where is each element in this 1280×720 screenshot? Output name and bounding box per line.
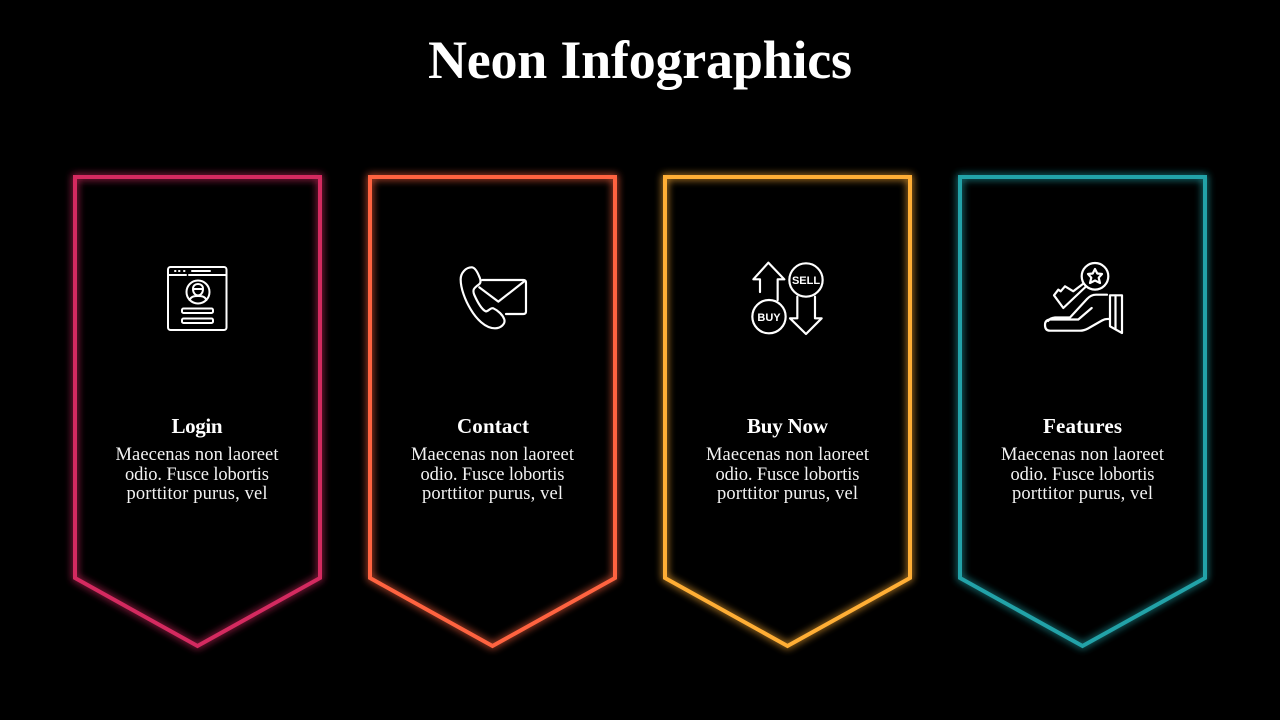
icon: phone and envelope <box>461 267 526 328</box>
text: login description: odio. Fusce lobortis <box>125 465 269 485</box>
panel: contact <box>370 177 615 646</box>
icon: buy and sell arrows: SELL <box>792 275 820 287</box>
text: buy now description: porttitor purus, vel <box>717 484 858 504</box>
title: Neon Infographics <box>428 30 852 90</box>
icon: buy and sell arrows <box>752 263 823 334</box>
heading: buy now: Buy Now <box>747 414 829 438</box>
panel: features <box>960 177 1205 646</box>
text: buy now description <box>706 445 870 504</box>
icon: login profile window <box>168 267 226 330</box>
text: features description: Maecenas non laoreet <box>1001 445 1165 465</box>
text: login description <box>116 445 279 504</box>
heading: contact: Contact <box>457 414 529 438</box>
panel border: login <box>75 177 320 646</box>
panel: buy now <box>665 177 910 646</box>
panel border: features <box>960 177 1205 646</box>
heading: features: Features <box>1043 414 1122 438</box>
text: features description: odio. Fusce lobortis <box>1010 465 1154 485</box>
text: login description: porttitor purus, vel <box>126 484 268 504</box>
text: buy now description: odio. Fusce lobortis <box>716 465 860 485</box>
heading: login: Login <box>172 414 223 438</box>
panel border: contact <box>370 177 615 646</box>
text: buy now description: Maecenas non laoreet <box>706 445 870 465</box>
text: contact description: Maecenas non laoreet <box>411 445 575 465</box>
text: login description: Maecenas non laoreet <box>116 445 279 465</box>
panel border: buy now <box>665 177 910 646</box>
icon: key in hand <box>1045 263 1122 333</box>
text: features description <box>1001 445 1165 504</box>
icon: buy and sell arrows: BUY <box>757 312 781 324</box>
panel: login <box>75 177 320 646</box>
text: contact description <box>411 445 575 504</box>
text: contact description: odio. Fusce lobortis <box>420 465 564 485</box>
text: contact description: porttitor purus, vel <box>422 484 563 504</box>
text: features description: porttitor purus, vel <box>1012 484 1153 504</box>
